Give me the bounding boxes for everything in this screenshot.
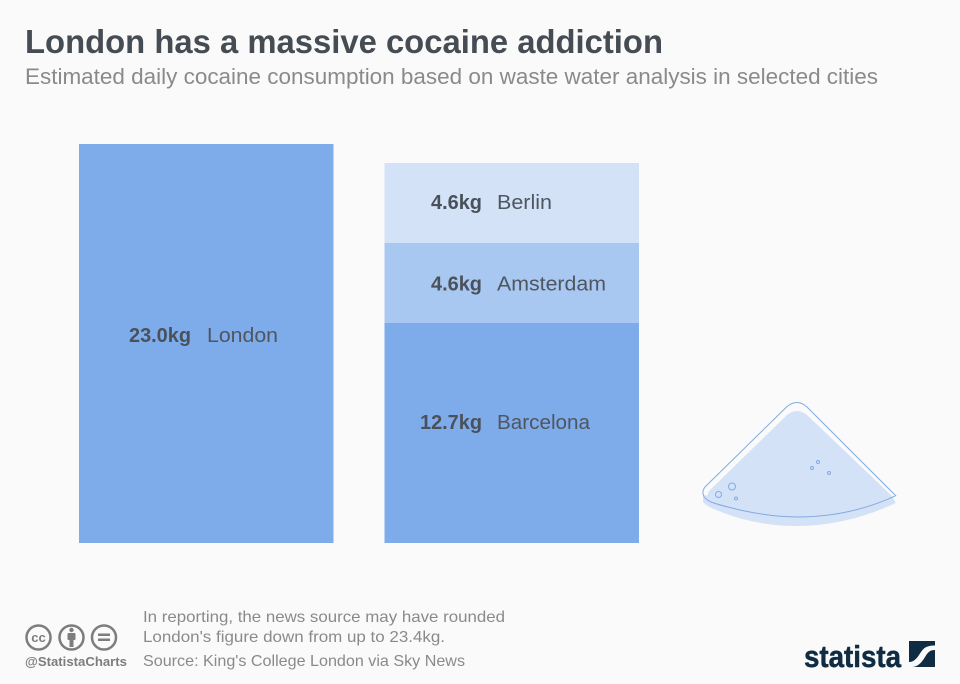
segment: Barcelona: 12.7kg xyxy=(420,412,482,434)
segment: Amsterdam xyxy=(384,243,639,323)
segment: Barcelona xyxy=(384,323,639,543)
segment: Berlin: 4.6kg xyxy=(431,192,482,214)
icon: creative commons licence xyxy=(26,626,116,650)
title: London has a massive cocaine addiction xyxy=(25,23,663,60)
handle: @StatistaCharts xyxy=(25,655,127,669)
logo: statista: statista xyxy=(804,639,902,674)
segment: Berlin: Berlin xyxy=(497,192,552,214)
icon: pile of powder xyxy=(703,402,896,526)
icon: cc: cc xyxy=(31,630,46,645)
source: Source: King's College London via Sky News xyxy=(143,653,465,670)
bar: London: London xyxy=(207,325,278,347)
segment: Amsterdam: 4.6kg xyxy=(431,274,482,296)
subtitle: Estimated daily cocaine consumption based on waste water analysis in selected cities xyxy=(25,64,878,89)
stacked bar: other cities xyxy=(384,163,639,543)
icon: attribution xyxy=(60,626,84,650)
footnote: London's figure down from up to 23.4kg. xyxy=(143,629,445,646)
bar: London: 23.0kg xyxy=(129,325,191,347)
segment: Amsterdam: Amsterdam xyxy=(497,274,606,296)
icon: no derivatives xyxy=(92,626,116,650)
segment: Barcelona: Barcelona xyxy=(497,412,591,434)
footnote: In reporting, the news source may have rounded xyxy=(143,609,505,626)
segment: Berlin xyxy=(384,163,639,243)
footnote xyxy=(143,609,505,646)
icon: statista mark xyxy=(909,641,935,667)
bar: London xyxy=(79,144,334,543)
